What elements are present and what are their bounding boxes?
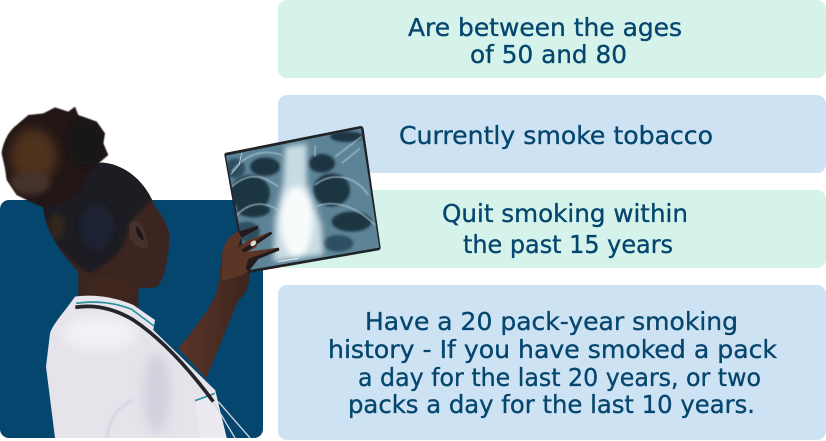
white coat	[46, 296, 227, 438]
panel: recently quit: the past 15 years	[463, 230, 673, 259]
ribs and collarbone	[232, 137, 375, 225]
lungs	[230, 131, 372, 232]
arm and hand	[178, 232, 250, 378]
stethoscope	[75, 306, 250, 438]
panel: recently quit	[278, 190, 826, 268]
panel: age range	[278, 0, 826, 78]
panel: recently quit: Quit smoking within	[442, 199, 688, 228]
panel: current smoker: Currently smoke tobacco	[399, 121, 713, 150]
photo: doctor viewed from behind	[2, 107, 250, 438]
head and neck	[40, 160, 169, 308]
panel: navy photo backdrop	[0, 200, 263, 438]
panel: pack-year history: a day for the last 20 years, or two	[358, 363, 761, 392]
spine and heart	[273, 143, 323, 262]
panel: pack-year history	[278, 285, 826, 440]
fingers over the film	[222, 226, 279, 280]
panel: pack-year history: packs a day for the last 10 years.	[348, 390, 755, 419]
panel: current smoker	[278, 95, 826, 173]
x-ray film held up	[224, 126, 381, 273]
panel: age range: Are between the ages	[408, 13, 682, 42]
panel: age range: of 50 and 80	[470, 40, 627, 69]
panel: pack-year history: history - If you have smoked a pack	[328, 335, 778, 364]
hair bun	[2, 107, 108, 208]
panel: pack-year history: Have a 20 pack-year smoking	[365, 307, 738, 336]
